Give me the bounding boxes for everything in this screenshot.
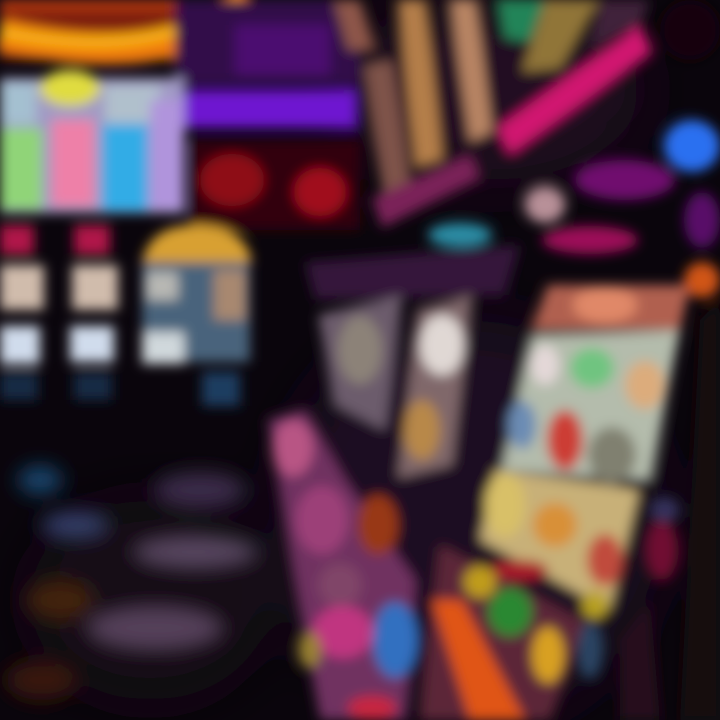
bottom colourful reels — [420, 545, 602, 720]
top centre purple backdrop and violet neon band — [175, 0, 360, 128]
red lights behind the machines — [190, 140, 360, 230]
top-left orange neon arc — [0, 0, 250, 60]
top-left slot machine display — [0, 70, 184, 213]
blue light — [664, 120, 720, 172]
top-right tan machine strips — [334, 0, 650, 200]
pink and magenta lower panel — [268, 410, 417, 720]
magenta glow at right — [428, 160, 720, 254]
right edge dark frame and lights — [620, 300, 720, 720]
dark diagonal beam accents — [372, 0, 720, 228]
magenta neon band — [497, 25, 652, 155]
lower-left row of slot machines — [0, 225, 252, 406]
lower-left dim floor and seats — [6, 466, 257, 700]
right large machine screen — [480, 262, 720, 619]
centre row of angled machines — [305, 245, 520, 478]
